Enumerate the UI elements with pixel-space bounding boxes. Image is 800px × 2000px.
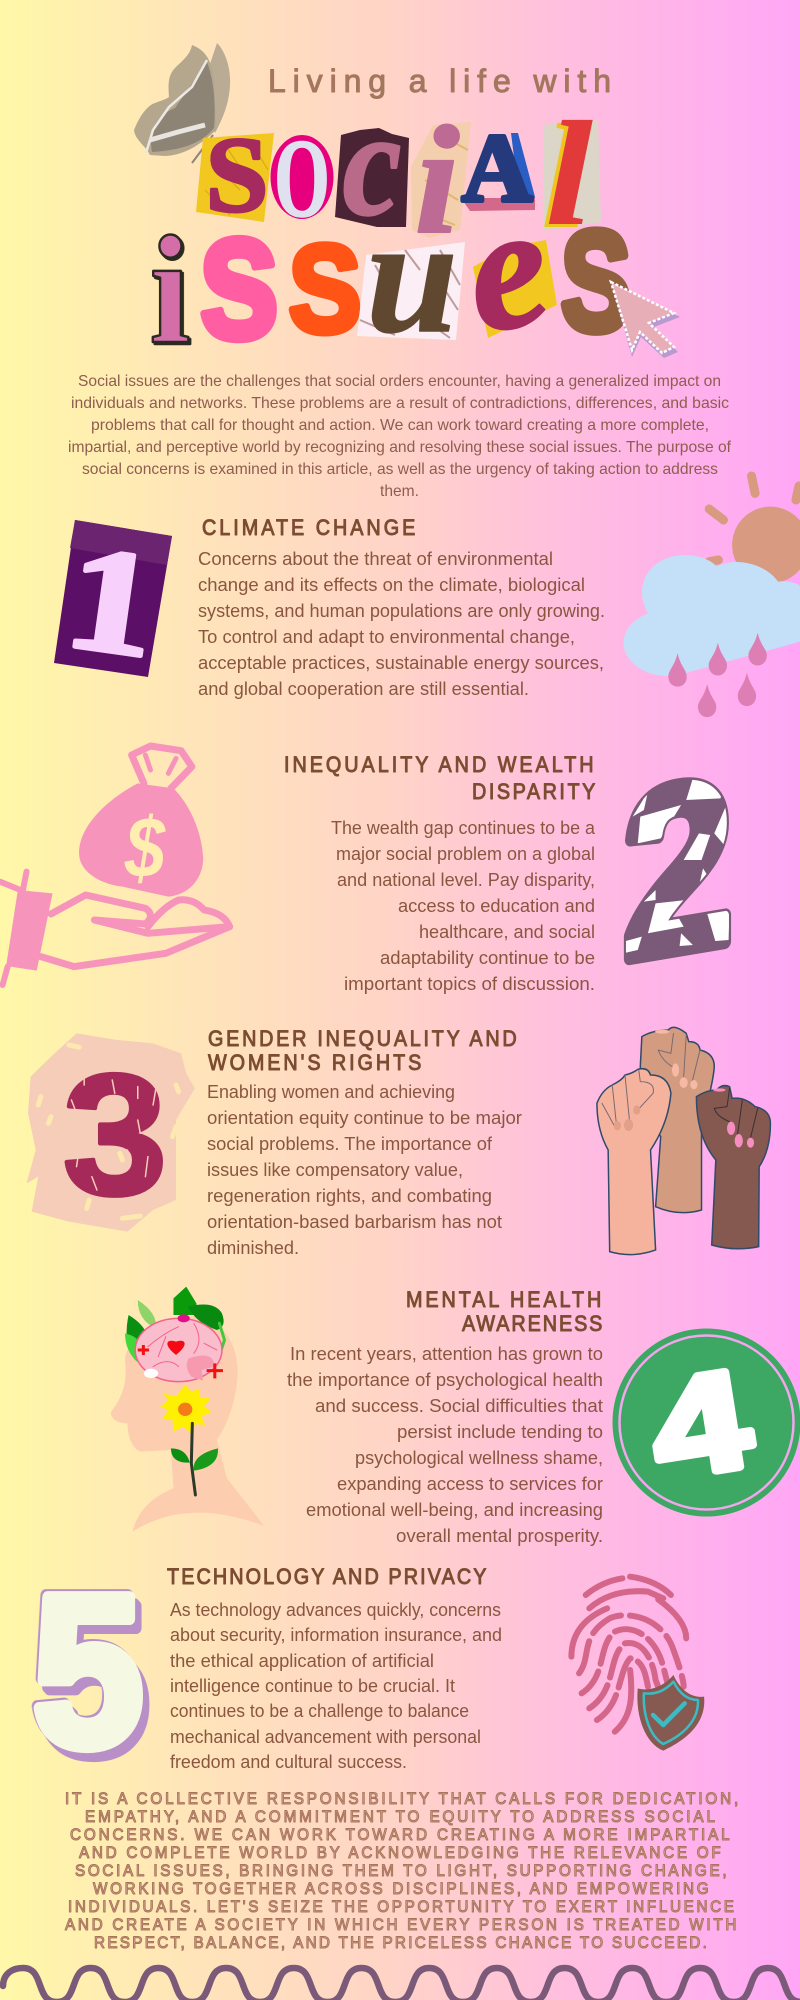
number 4 badge: 4	[640, 1340, 761, 1509]
icon: sun and rain cloud	[623, 476, 800, 717]
heading: gender inequality	[208, 1027, 517, 1075]
text block: climate change: To control and adapt to environmental change,	[198, 627, 575, 647]
text block: technology: continues to be a challenge to balance	[170, 1701, 469, 1721]
heading: gender inequality: WOMEN'S RIGHTS	[208, 1051, 421, 1075]
text block: mental health: emotional well-being, and increasing	[306, 1500, 603, 1520]
text block: technology: mechanical advancement with personal	[170, 1727, 481, 1747]
heading: inequality and wealth disparity	[284, 753, 595, 804]
closing statement: INDIVIDUALS. LET'S SEIZE THE OPPORTUNITY TO EXERT INFLUENCE	[68, 1897, 734, 1916]
text block: inequality: and national level. Pay disparity,	[337, 870, 595, 890]
collage word: ISSUES	[150, 166, 680, 378]
text block: gender inequality	[207, 1082, 522, 1258]
text block: gender inequality: diminished.	[207, 1238, 299, 1258]
letter S tile: S	[205, 114, 269, 234]
text block: technology	[170, 1600, 502, 1772]
text block: gender inequality: Enabling women and achieving	[207, 1082, 455, 1102]
letter C tile: c	[343, 80, 401, 247]
number 5: 5	[33, 1550, 143, 1791]
intro paragraph: Social issues are the challenges that social orders encounter, having a generalized impact on	[78, 373, 721, 390]
letter I: i	[150, 204, 190, 376]
intro paragraph: individuals and networks. These problems are a result of contradictions, differences, and basic	[71, 395, 729, 412]
text block: mental health: persist include tending to	[397, 1422, 603, 1442]
closing statement: CONCERNS. WE CAN WORK TOWARD CREATING A MORE IMPARTIAL	[70, 1825, 730, 1844]
panel: mental health awareness	[111, 1287, 800, 1546]
icon: dollar sign: $	[124, 800, 166, 895]
text block: inequality: The wealth gap continues to be a	[331, 818, 596, 838]
intro paragraph: social concerns is examined in this article, as well as the urgency of taking action to address	[82, 461, 718, 478]
number 1 tile: 1	[56, 512, 168, 690]
text block: inequality: important topics of discussion.	[344, 974, 595, 994]
heading: inequality and wealth disparity: INEQUALITY AND WEALTH	[284, 753, 594, 777]
text block: climate change	[198, 549, 605, 699]
closing statement: IT IS A COLLECTIVE RESPONSIBILITY THAT CALLS FOR DEDICATION,	[65, 1789, 738, 1808]
number 3 on torn paper	[27, 1033, 195, 1232]
letter A tile: A	[462, 115, 533, 223]
text block: climate change: acceptable practices, sustainable energy sources,	[198, 653, 604, 673]
text block: mental health: expanding access to services for	[337, 1474, 603, 1494]
number 2 with checker pattern	[624, 777, 732, 966]
text block: technology: freedom and cultural success.	[170, 1752, 407, 1772]
text block: gender inequality: issues like compensatory value,	[207, 1160, 463, 1180]
intro paragraph: them.	[380, 483, 419, 500]
icon: butterfly	[134, 43, 230, 163]
text block: technology: As technology advances quickly, concerns	[170, 1600, 501, 1620]
heading: inequality and wealth disparity: DISPARITY	[472, 780, 595, 804]
number 2 with checker pattern: 2	[623, 729, 733, 1010]
text block: inequality: access to education and	[398, 896, 595, 916]
heading: mental health awareness: MENTAL HEALTH	[406, 1288, 601, 1312]
closing statement: EMPATHY, AND A COMMITMENT TO EQUITY TO ADDRESS SOCIAL	[85, 1807, 715, 1826]
panel: inequality and wealth disparity	[0, 729, 734, 1010]
text block: gender inequality: regeneration rights, and combating	[207, 1186, 492, 1206]
text block: gender inequality: orientation equity continue to be major	[207, 1108, 522, 1128]
text block: mental health: the importance of psychological health	[287, 1370, 603, 1390]
heading: climate change: CLIMATE CHANGE	[202, 516, 415, 540]
text block: mental health: In recent years, attention has grown to	[290, 1344, 603, 1364]
letter L tile: l	[545, 90, 593, 256]
text block: gender inequality: social problems. The importance of	[207, 1134, 493, 1154]
text block: inequality	[331, 818, 596, 994]
panel: climate change	[54, 476, 800, 717]
closing statement: RESPECT, BALANCE, AND THE PRICELESS CHANCE TO SUCCEED.	[94, 1933, 707, 1952]
closing statement: AND CREATE A SOCIETY IN WHICH EVERY PERSON IS TREATED WITH	[65, 1915, 736, 1934]
panel: gender inequality and women's rights	[27, 1027, 770, 1258]
icon: three raised fists	[597, 1027, 770, 1255]
letter O tile: O	[274, 117, 330, 241]
heading: mental health awareness: AWARENESS	[462, 1312, 602, 1336]
text block: inequality: adaptability continue to be	[380, 948, 595, 968]
text block: mental health: overall mental prosperity.	[396, 1526, 603, 1546]
intro paragraph: problems that call for thought and action. We can work toward creating a more complete,	[91, 417, 709, 434]
text block: mental health: psychological wellness shame,	[355, 1448, 603, 1468]
icon: hand holding money bag	[0, 746, 230, 985]
heading: technology and privacy: TECHNOLOGY AND PRIVACY	[167, 1565, 487, 1589]
text block: climate change: systems, and human populations are only growing.	[198, 601, 605, 621]
icon: fingerprint with shield	[571, 1577, 704, 1751]
closing statement: SOCIAL ISSUES, BRINGING THEM TO LIGHT, SUPPORTING CHANGE,	[75, 1861, 727, 1880]
text block: climate change: change and its effects on the climate, biological	[198, 575, 585, 595]
closing statement: WORKING TOGETHER ACROSS DISCIPLINES, AND EMPOWERING	[93, 1879, 709, 1898]
panel: technology and privacy	[33, 1550, 704, 1791]
text block: inequality: major social problem on a global	[336, 844, 595, 864]
intro paragraph: impartial, and perceptive world by recognizing and resolving these social issues. The purpose of	[68, 439, 732, 456]
number 4 badge	[612, 1328, 800, 1516]
number 3 on torn paper: 3	[62, 1039, 168, 1231]
text block: mental health	[287, 1344, 603, 1546]
letter S brown: S	[561, 203, 631, 361]
text block: climate change: and global cooperation are still essential.	[198, 679, 529, 699]
closing statement: AND COMPLETE WORLD BY ACKNOWLEDGING THE RELEVANCE OF	[79, 1843, 721, 1862]
closing statement	[65, 1789, 738, 1952]
text block: technology: about security, information insurance, and	[170, 1625, 502, 1645]
text block: inequality: healthcare, and social	[419, 922, 595, 942]
text block: technology: the ethical application of artificial	[170, 1651, 434, 1671]
heading: gender inequality: GENDER INEQUALITY AND	[208, 1027, 517, 1051]
icon: cursor arrow	[611, 282, 680, 358]
wavy bottom border	[3, 1968, 800, 2000]
text block: gender inequality: orientation-based barbarism has not	[207, 1212, 502, 1232]
letter I tile: i	[414, 94, 460, 266]
collage word: SOCIAL	[196, 80, 601, 266]
text block: mental health: and success. Social difficulties that	[315, 1396, 603, 1416]
letter E tile: e	[452, 166, 562, 370]
text block: climate change: Concerns about the threat of environmental	[198, 549, 553, 569]
letter S orange: S	[289, 219, 361, 359]
heading: mental health awareness	[406, 1288, 602, 1336]
title line: Living a life with: Living a life with	[268, 63, 611, 99]
text block: technology: intelligence continue to be crucial. It	[170, 1676, 455, 1696]
letter U tile: u	[366, 184, 458, 367]
intro paragraph	[68, 373, 732, 500]
letter S pink: s	[198, 171, 280, 378]
icon: head with brain and flower	[111, 1287, 264, 1532]
